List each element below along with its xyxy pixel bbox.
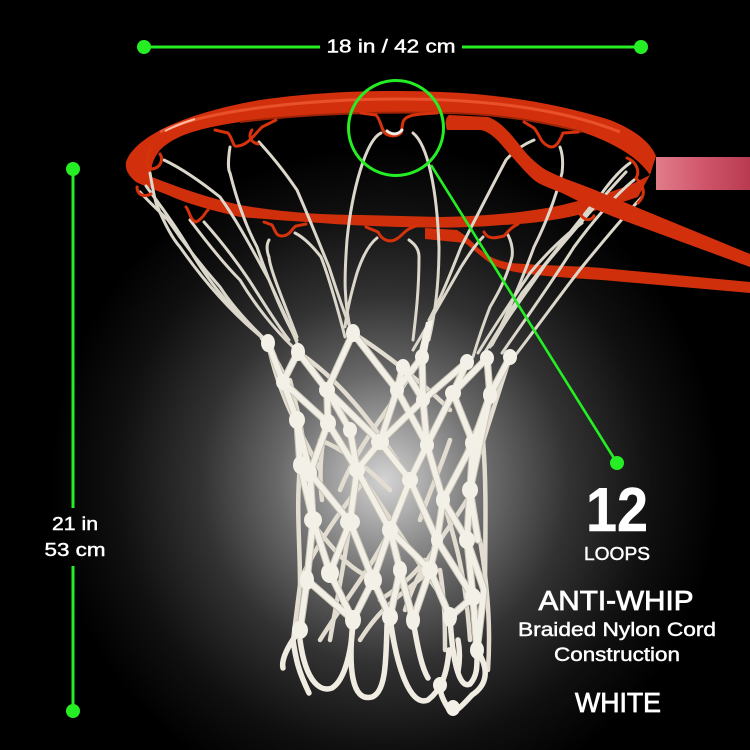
mounting plate <box>656 157 750 190</box>
product description: ANTI-WHIP <box>538 585 694 616</box>
upper brace <box>446 115 750 267</box>
product description: Braided Nylon Cord <box>518 619 716 641</box>
product description <box>518 585 716 666</box>
height dimension: 21 in / 53 cm <box>44 162 106 718</box>
rim hooks <box>137 113 643 241</box>
loop count: 12 <box>586 476 648 545</box>
lower brace <box>425 228 750 293</box>
rim <box>126 91 656 228</box>
height dimension: 21 in / 53 cm: 21 in <box>52 513 98 534</box>
width dimension: 18 in / 42 cm: 18 in / 42 cm <box>326 36 456 56</box>
loop callout circle and leader <box>348 80 624 470</box>
net mesh <box>262 333 510 670</box>
loop count: LOOPS <box>584 544 650 564</box>
colour label: WHITE <box>575 687 661 718</box>
width dimension: 18 in / 42 cm <box>137 36 648 56</box>
net knots <box>261 320 517 716</box>
net bottom loops <box>283 617 485 712</box>
net upper strands <box>140 133 642 357</box>
product description: Construction <box>554 644 680 666</box>
height dimension: 21 in / 53 cm: 53 cm <box>44 539 106 560</box>
